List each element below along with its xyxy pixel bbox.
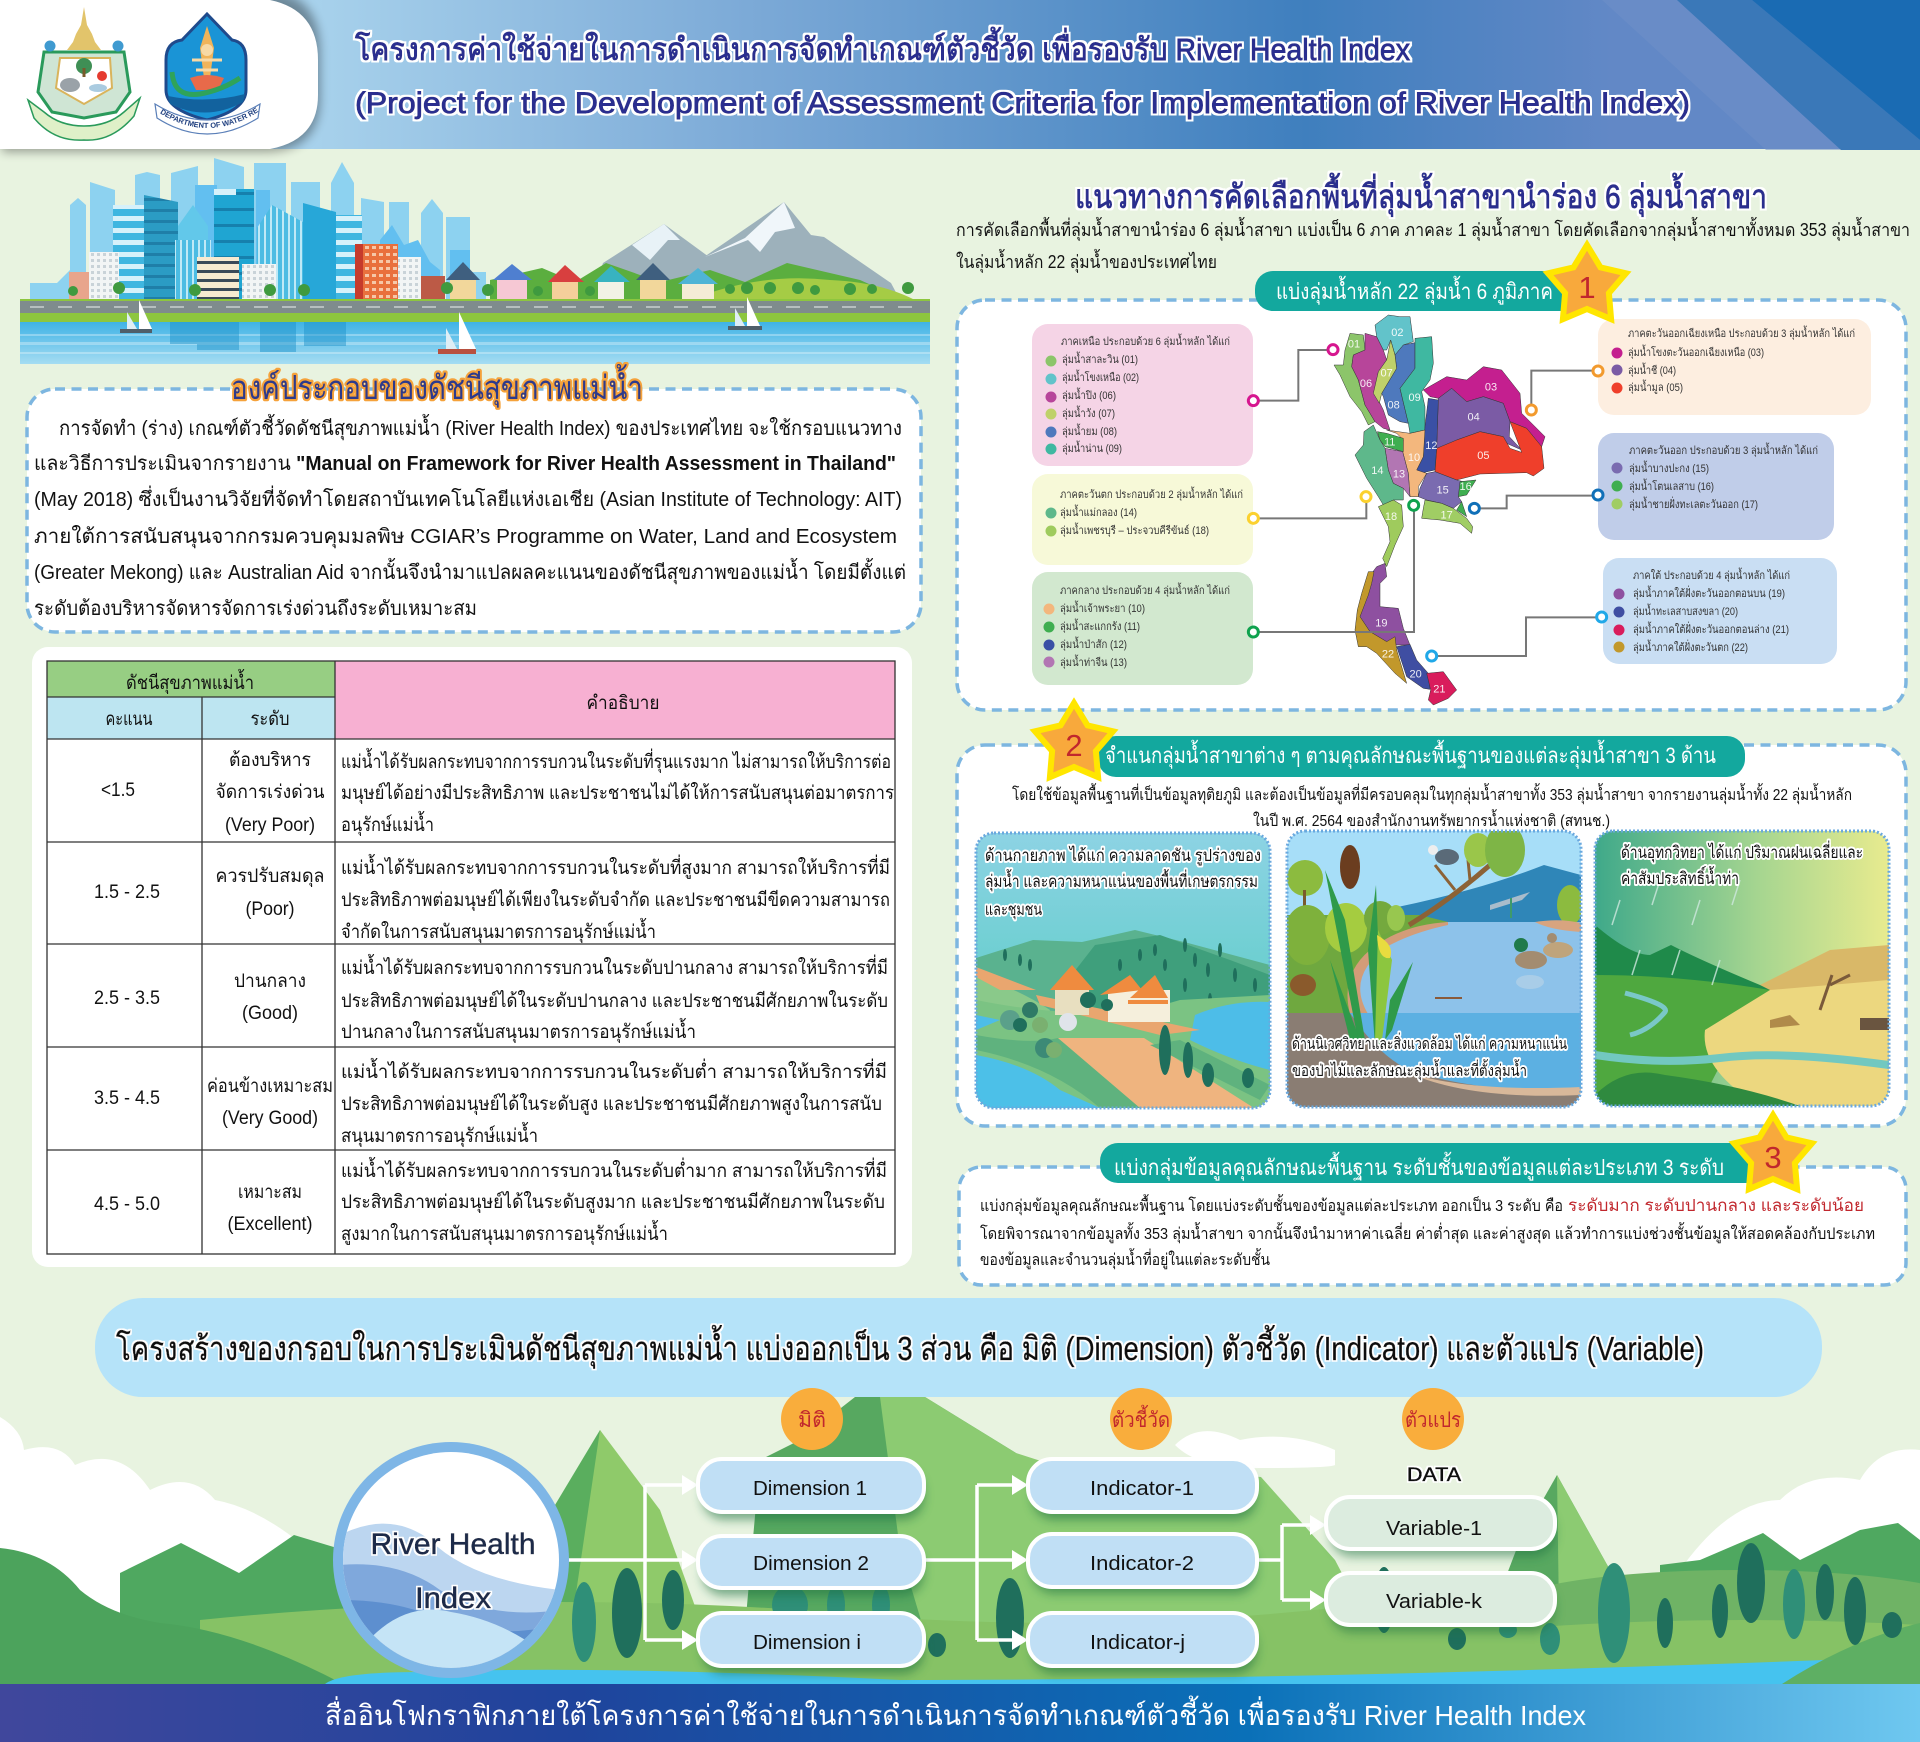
table levels: (Poor) bbox=[246, 899, 294, 920]
region box: central: ลุ่มน้ำสะแกกรัง (11) bbox=[1060, 618, 1140, 633]
indicator boxes: Indicator-1 bbox=[1090, 1478, 1194, 1500]
mountains bbox=[120, 1535, 640, 1684]
card: hydrology bbox=[1595, 831, 1889, 1106]
card: physical bbox=[976, 833, 1270, 1108]
table levels: (Very Poor) bbox=[225, 815, 315, 836]
column badges: DATA bbox=[1407, 1465, 1461, 1486]
table descriptions: ประสิทธิภาพต่อมนุษย์ได้ในระดับปานกลาง และประชาชนมีศักยภาพในระดับ bbox=[341, 990, 888, 1013]
river health index circle bbox=[333, 1442, 569, 1680]
card text: physical: ลุ่มน้ำ และความหนาแน่นของพื้นที่เกษตรกรรม bbox=[985, 869, 1258, 892]
column badges: ตัวชี้วัด bbox=[1112, 1405, 1170, 1432]
region box: north: ลุ่มน้ำวัง (07) bbox=[1062, 405, 1115, 420]
houses row bbox=[446, 262, 718, 300]
region box: east: ลุ่มน้ำบางปะกง (15) bbox=[1629, 460, 1709, 475]
star badge 2: 2 bbox=[1065, 728, 1083, 763]
card text: physical: ด้านกายภาพ ได้แก่ ความลาดชัน รูปร่างของ bbox=[985, 845, 1261, 866]
title line 1: โครงการค่าใช้จ่ายในการดำเนินการจัดทำเกณฑ์ตัวชี้วัด เพื่อรองรับ River Health Index bbox=[355, 27, 1410, 67]
map of Thailand river basins: 16 bbox=[1460, 481, 1472, 493]
table descriptions: ประสิทธิภาพต่อมนุษย์ได้ในระดับสูง และประชาชนมีศักยภาพสูงในการสนับ bbox=[341, 1093, 882, 1116]
table descriptions: ประสิทธิภาพต่อมนุษย์ได้เพียงในระดับจำกัด และประชาชนมีขีดความสามารถ bbox=[341, 889, 890, 912]
table descriptions: อนุรักษ์แม่น้ำ bbox=[341, 811, 434, 837]
region box: north: ลุ่มน้ำสาละวิน (01) bbox=[1062, 351, 1138, 366]
map of Thailand river basins: 13 bbox=[1393, 468, 1405, 480]
circle label: River Health bbox=[370, 1528, 536, 1561]
step 3 pill: แบ่งกลุ่มข้อมูลคุณลักษณะพื้นฐาน ระดับชั้นของข้อมูลแต่ละประเภท 3 ระดับ bbox=[1114, 1152, 1724, 1181]
column badges: ตัวแปร bbox=[1405, 1409, 1461, 1432]
region box: central: ภาคกลาง ประกอบด้วย 4 ลุ่มน้ำหลัก ได้แก่ bbox=[1060, 582, 1230, 597]
indicator boxes: Indicator-2 bbox=[1090, 1553, 1194, 1575]
table scores: 1.5 - 2.5 bbox=[94, 882, 160, 903]
table descriptions: สูงมากในการสนับสนุนมาตรการอนุรักษ์แม่น้ำ bbox=[341, 1220, 668, 1246]
step 1 pill bbox=[1255, 271, 1595, 311]
region box: northeast bbox=[1598, 319, 1871, 415]
footer banner bbox=[0, 1684, 1920, 1742]
foreground towers bbox=[113, 205, 144, 300]
region box: north: ลุ่มน้ำโขงเหนือ (02) bbox=[1062, 369, 1139, 384]
table levels: จัดการเร่งด่วน bbox=[216, 782, 325, 803]
card text: physical: และชุมชน bbox=[985, 900, 1042, 920]
circle label bbox=[370, 1528, 536, 1615]
star badge 1: 1 bbox=[1578, 270, 1596, 305]
step 3 description: ระดับมาก ระดับปานกลาง และระดับน้อย bbox=[1568, 1196, 1864, 1215]
variable boxes bbox=[1326, 1497, 1555, 1633]
step 2 description bbox=[1012, 783, 1852, 830]
card: ecology bbox=[1284, 823, 1583, 1107]
circle label: Index bbox=[415, 1582, 491, 1615]
star badge 1 bbox=[1548, 245, 1626, 319]
panel: river health components text: (Greater Mekong) และ Australian Aid จากนั้นจึงนำมาแปลผลคะแนนของดัชนีสุขภาพของแม่น้ำ โดยมีตั้งแต่ bbox=[34, 558, 906, 585]
panel: river health components text bbox=[27, 364, 921, 632]
landscape background bbox=[0, 1397, 1920, 1684]
map of Thailand river basins: 01 bbox=[1348, 338, 1360, 350]
table descriptions: แม่น้ำได้รับผลกระทบจากการรบกวนในระดับที่รุนแรงมาก ไม่สามารถให้บริการต่อ bbox=[341, 748, 891, 774]
table levels: ควรปรับสมดุล bbox=[216, 866, 324, 888]
map of Thailand river basins: 11 bbox=[1384, 436, 1395, 448]
table descriptions: แม่น้ำได้รับผลกระทบจากการรบกวนในระดับต่ำ สามารถให้บริการที่มี bbox=[341, 1058, 887, 1083]
card text: hydrology: ด้านอุทกวิทยา ได้แก่ ปริมาณฝนเฉลี่ยและ bbox=[1621, 840, 1863, 863]
panel: river health components text: ภายใต้การสนับสนุนจากกรมควบคุมมลพิษ CGIAR’s Programme on Water, Land and Ecosystem bbox=[34, 525, 897, 549]
table scores: 3.5 - 4.5 bbox=[94, 1088, 160, 1109]
column badges: มิติ bbox=[798, 1409, 826, 1432]
region box: northeast: ลุ่มน้ำชี (04) bbox=[1628, 362, 1676, 377]
dimension boxes: Dimension i bbox=[753, 1632, 861, 1654]
star badge 3 bbox=[1734, 1115, 1812, 1189]
icon: sailboats bbox=[120, 297, 762, 354]
map of Thailand river basins: 20 bbox=[1410, 668, 1422, 680]
map of Thailand river basins: 18 bbox=[1385, 511, 1397, 523]
dimension boxes: Dimension 1 bbox=[753, 1478, 867, 1500]
table levels: (Very Good) bbox=[222, 1108, 318, 1129]
panel: river health components text: และวิธีการประเมินจากรายงาน "Manual on Framework for River Health Assessment in Thailand" bbox=[34, 453, 896, 475]
clouds bbox=[0, 1417, 330, 1620]
column badges bbox=[781, 1388, 1464, 1486]
region box: northeast: ภาคตะวันออกเฉียงเหนือ ประกอบด้วย 3 ลุ่มน้ำหลัก ได้แก่ bbox=[1628, 325, 1855, 340]
step 3 description bbox=[980, 1194, 1875, 1270]
star badge 3: 3 bbox=[1764, 1140, 1782, 1175]
star badge 2 bbox=[1035, 703, 1113, 777]
region box: central: ลุ่มน้ำเจ้าพระยา (10) bbox=[1060, 600, 1145, 615]
background towers bbox=[30, 158, 486, 300]
region box: central: ลุ่มน้ำท่าจีน (13) bbox=[1060, 654, 1127, 669]
variable boxes: Variable-k bbox=[1386, 1591, 1483, 1613]
region box: central: ลุ่มน้ำป่าสัก (12) bbox=[1060, 636, 1127, 651]
map connector lines bbox=[1253, 350, 1603, 656]
step 2 description: ในปี พ.ศ. 2564 ของสำนักงานทรัพยากรน้ำแห่งชาติ (สทนช.) bbox=[1253, 809, 1610, 830]
map of Thailand river basins: 03 bbox=[1485, 382, 1497, 394]
table descriptions: แม่น้ำได้รับผลกระทบจากการรบกวนในระดับต่ำมาก สามารถให้บริการที่มี bbox=[341, 1157, 887, 1182]
region box: west: ภาคตะวันตก ประกอบด้วย 2 ลุ่มน้ำหลัก ได้แก่ bbox=[1060, 486, 1243, 501]
region box: north bbox=[1032, 324, 1253, 466]
map of Thailand river basins: 12 bbox=[1425, 440, 1437, 452]
table descriptions: แม่น้ำได้รับผลกระทบจากการรบกวนในระดับที่สูงมาก สามารถให้บริการที่มี bbox=[341, 854, 890, 879]
panel: step 2 basin characteristics bbox=[957, 736, 1906, 1126]
table descriptions bbox=[341, 748, 894, 1246]
region box: south: ลุ่มน้ำภาคใต้ฝั่งตะวันออกตอนล่าง (21) bbox=[1633, 621, 1789, 636]
step 1 pill: แบ่งลุ่มน้ำหลัก 22 ลุ่มน้ำ 6 ภูมิภาค bbox=[1276, 276, 1553, 305]
panel: river health components text: (May 2018) ซึ่งเป็นงานวิจัยที่จัดทำโดยสถาบันเทคโนโลยีแห่งเอเชีย (Asian Institute of Technology: AIT) bbox=[34, 485, 902, 511]
icon: department of water resources logo bbox=[154, 12, 261, 135]
map of Thailand river basins bbox=[1248, 315, 1607, 705]
map of Thailand river basins: 09 bbox=[1409, 392, 1421, 404]
card text: hydrology bbox=[1621, 840, 1863, 888]
table scores: <1.5 bbox=[101, 780, 135, 801]
table scores: 2.5 - 3.5 bbox=[94, 988, 160, 1009]
map of Thailand river basins: 17 bbox=[1441, 510, 1453, 522]
region box: west bbox=[1032, 474, 1253, 565]
foreground ground bbox=[200, 1585, 1920, 1684]
city skyline illustration bbox=[20, 158, 930, 364]
title pill: framework structure bbox=[95, 1298, 1822, 1397]
table scores bbox=[94, 780, 160, 1215]
region box: south: ลุ่มน้ำทะเลสาบสงขลา (20) bbox=[1633, 603, 1738, 618]
table levels: (Excellent) bbox=[228, 1214, 312, 1235]
table header cells bbox=[47, 661, 895, 739]
table levels: เหมาะสม bbox=[238, 1182, 302, 1203]
dimension boxes: Dimension 2 bbox=[753, 1553, 869, 1575]
region box: east bbox=[1598, 433, 1834, 540]
card text: ecology: ด้านนิเวศวิทยาและสิ่งแวดล้อม ได้แก่ ความหนาแน่น bbox=[1292, 1032, 1567, 1053]
map of Thailand river basins: 22 bbox=[1382, 648, 1394, 660]
logo panel bbox=[0, 0, 326, 158]
region box: south: ลุ่มน้ำภาคใต้ฝั่งตะวันตก (22) bbox=[1633, 639, 1748, 654]
region box: northeast: ลุ่มน้ำมูล (05) bbox=[1628, 379, 1683, 394]
map of Thailand river basins: 04 bbox=[1468, 412, 1480, 424]
map of Thailand river basins: 08 bbox=[1388, 400, 1400, 412]
region box: central bbox=[1032, 572, 1253, 685]
table descriptions: สนุนมาตรการอนุรักษ์แม่น้ำ bbox=[341, 1122, 538, 1148]
table descriptions: ปานกลางในการสนับสนุนมาตรการอนุรักษ์แม่น้ำ bbox=[341, 1018, 696, 1044]
title line 2: (Project for the Development of Assessment Criteria for Implementation of River Health Index) bbox=[355, 87, 1690, 120]
table levels: ค่อนข้างเหมาะสม bbox=[207, 1076, 333, 1097]
region box: north: ลุ่มน้ำยม (08) bbox=[1062, 423, 1117, 438]
map of Thailand river basins: 14 bbox=[1371, 465, 1383, 477]
flow arrows bbox=[565, 1475, 1326, 1650]
region box: northeast: ลุ่มน้ำโขงตะวันออกเฉียงเหนือ (03) bbox=[1628, 344, 1764, 359]
region box: south: ลุ่มน้ำภาคใต้ฝั่งตะวันออกตอนบน (19) bbox=[1633, 585, 1785, 600]
region box: north: ลุ่มน้ำปิง (06) bbox=[1062, 387, 1116, 402]
card text: physical bbox=[985, 845, 1261, 920]
region box: west: ลุ่มน้ำแม่กลอง (14) bbox=[1060, 504, 1137, 519]
text block: selection intro bbox=[956, 217, 1910, 273]
table levels: ต้องบริหาร bbox=[229, 750, 311, 771]
step 2 pill bbox=[1098, 736, 1745, 777]
region box: south: ภาคใต้ ประกอบด้วย 4 ลุ่มน้ำหลัก ได้แก่ bbox=[1633, 567, 1790, 582]
table levels: (Good) bbox=[242, 1003, 298, 1024]
region box: east: ภาคตะวันออก ประกอบด้วย 3 ลุ่มน้ำหลัก ได้แก่ bbox=[1629, 442, 1818, 457]
map of Thailand river basins: 05 bbox=[1477, 450, 1489, 462]
step 3 pill bbox=[1100, 1143, 1780, 1183]
panel: index table bbox=[32, 647, 912, 1267]
map of Thailand river basins: 21 bbox=[1433, 683, 1445, 695]
text block: selection intro: ในลุ่มน้ำหลัก 22 ลุ่มน้ำของประเทศไทย bbox=[956, 249, 1217, 273]
panel: step 3 grouping levels bbox=[959, 1143, 1906, 1285]
step 2 pill: จำแนกลุ่มน้ำสาขาต่าง ๆ ตามคุณลักษณะพื้นฐานของแต่ละลุ่มน้ำสาขา 3 ด้าน bbox=[1105, 740, 1716, 769]
panel: index table: ระดับ bbox=[250, 709, 290, 730]
table grid bbox=[47, 661, 895, 1254]
road, grass and water bbox=[20, 299, 930, 301]
map of Thailand river basins: 15 bbox=[1437, 485, 1449, 497]
header banner bbox=[0, 0, 1920, 150]
trees bbox=[612, 1543, 1902, 1658]
card text: ecology bbox=[1292, 1032, 1567, 1081]
icon: provincial crest logo bbox=[28, 7, 140, 140]
table descriptions: จำกัดในการสนับสนุนมาตรการอนุรักษ์แม่น้ำ bbox=[341, 918, 656, 944]
dimension boxes bbox=[698, 1459, 924, 1674]
step 3 description: แบ่งกลุ่มข้อมูลคุณลักษณะพื้นฐาน โดยแบ่งระดับชั้นของข้อมูลแต่ละประเภท ออกเป็น 3 ระดับ คือ bbox=[980, 1194, 1563, 1216]
table levels bbox=[207, 750, 333, 1235]
region box: south bbox=[1603, 558, 1837, 664]
region box: north: ลุ่มน้ำน่าน (09) bbox=[1062, 440, 1122, 455]
map of Thailand river basins: 07 bbox=[1381, 367, 1393, 379]
map of Thailand river basins: 19 bbox=[1375, 618, 1387, 630]
table scores: 4.5 - 5.0 bbox=[94, 1194, 160, 1215]
map of Thailand river basins: 10 bbox=[1408, 452, 1420, 464]
indicator boxes: Indicator-j bbox=[1090, 1632, 1185, 1654]
map connector nodes bbox=[1248, 345, 1607, 661]
map of Thailand river basins: 02 bbox=[1391, 327, 1403, 339]
region box: west: ลุ่มน้ำเพชรบุรี – ประจวบคีรีขันธ์ (18) bbox=[1060, 522, 1209, 537]
region box: east: ลุ่มน้ำชายฝั่งทะเลตะวันออก (17) bbox=[1629, 496, 1758, 511]
indicator boxes bbox=[1028, 1459, 1257, 1674]
card text: ecology: ของป่าไม้และลักษณะลุ่มน้ำและที่ตั้งลุ่มน้ำ bbox=[1292, 1059, 1527, 1081]
table descriptions: มนุษย์ได้อย่างมีประสิทธิภาพ และประชาชนไม่ได้ให้การสนับสนุนต่อมาตรการ bbox=[341, 782, 894, 805]
step 3 description: ของข้อมูลและจำนวนลุ่มน้ำที่อยู่ในแต่ละระดับชั้น bbox=[980, 1248, 1270, 1270]
map of Thailand river basins: 06 bbox=[1360, 378, 1372, 390]
card text: hydrology: ค่าสัมประสิทธิ์น้ำท่า bbox=[1621, 866, 1739, 888]
heading: components of river health index: องค์ประกอบของดัชนีสุขภาพแม่น้ำ bbox=[231, 364, 643, 408]
mountains bbox=[590, 202, 900, 300]
panel: index table: คะแนน bbox=[106, 709, 153, 730]
panel: river health components text: ระดับต้องบริหารจัดหารจัดการเร่งด่วนถึงระดับเหมาะสม bbox=[34, 598, 477, 620]
table descriptions: ประสิทธิภาพต่อมนุษย์ได้ในระดับสูงมาก และประชาชนมีศักยภาพในระดับ bbox=[341, 1191, 885, 1214]
table descriptions: แม่น้ำได้รับผลกระทบจากการรบกวนในระดับปานกลาง สามารถให้บริการที่มี bbox=[341, 954, 888, 979]
footer banner: สื่ออินโฟกราฟิกภายใต้โครงการค่าใช้จ่ายในการดำเนินการจัดทำเกณฑ์ตัวชี้วัด เพื่อรองรับ River Health Index bbox=[325, 1695, 1586, 1731]
table levels: ปานกลาง bbox=[234, 971, 306, 992]
variable boxes: Variable-1 bbox=[1386, 1518, 1482, 1540]
panel: index table: ดัชนีสุขภาพแม่น้ำ bbox=[126, 669, 254, 695]
region box: north: ภาคเหนือ ประกอบด้วย 6 ลุ่มน้ำหลัก ได้แก่ bbox=[1061, 333, 1230, 348]
heading: pilot sub-basin selection: แนวทางการคัดเลือกพื้นที่ลุ่มน้ำสาขานำร่อง 6 ลุ่มน้ำสาขา bbox=[1075, 173, 1767, 217]
panel: step 1 map bbox=[957, 271, 1906, 710]
panel: river health components text: การจัดทำ (ร่าง) เกณฑ์ตัวชี้วัดดัชนีสุขภาพแม่น้ำ (River Health Index) ของประเทศไทย จะใช้กรอบแนวทาง bbox=[59, 414, 902, 441]
panel: index table: คำอธิบาย bbox=[586, 693, 660, 714]
region box: east: ลุ่มน้ำโตนเลสาบ (16) bbox=[1629, 478, 1714, 493]
